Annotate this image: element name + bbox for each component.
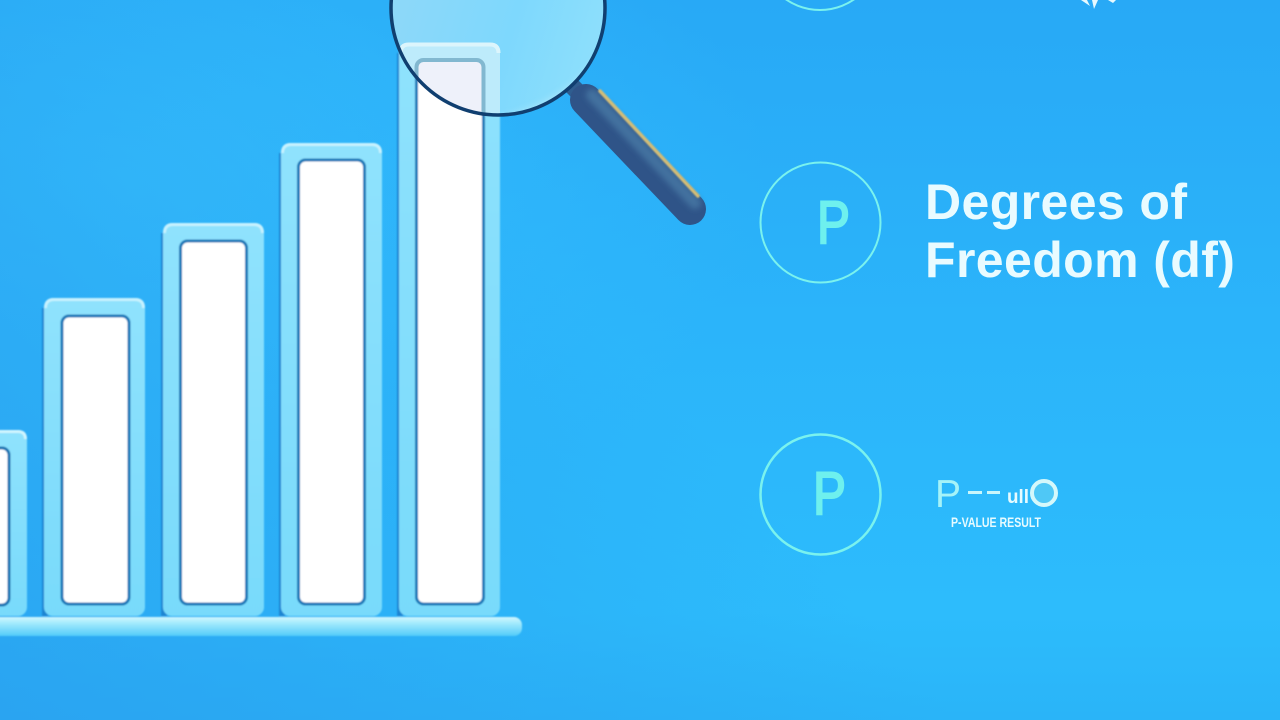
item: degrees of freedom [760, 162, 1235, 288]
magnifier handle [586, 91, 698, 209]
icon: magnifying glass [391, 0, 698, 209]
heading: Freedom (df) [925, 232, 1235, 288]
heading: Degrees of [925, 174, 1187, 230]
lens view of bar [400, 42, 578, 114]
bar 3 [161, 223, 264, 616]
bar 4 [279, 143, 382, 616]
garbled label: ull [1007, 487, 1029, 508]
top circle [760, 0, 880, 10]
garbled label [935, 473, 1056, 530]
top label fragment [1081, 0, 1116, 9]
circle icon P [760, 434, 880, 554]
circle icon P: P [817, 189, 850, 256]
garbled label: P [935, 473, 961, 516]
magnifier lens [389, 0, 607, 117]
item: cropped top marker [760, 0, 1116, 10]
bar 5 [397, 43, 500, 616]
item: p-value [760, 434, 1056, 554]
chart baseline [0, 617, 522, 636]
garbled label: P-VALUE RESULT [951, 514, 1041, 530]
bar 2 [42, 298, 145, 616]
bar chart [0, 43, 522, 636]
circle icon P: P [813, 460, 846, 527]
magnifier neck [566, 80, 590, 104]
circle icon P [760, 162, 880, 282]
bar 1 (cropped) [0, 430, 27, 616]
